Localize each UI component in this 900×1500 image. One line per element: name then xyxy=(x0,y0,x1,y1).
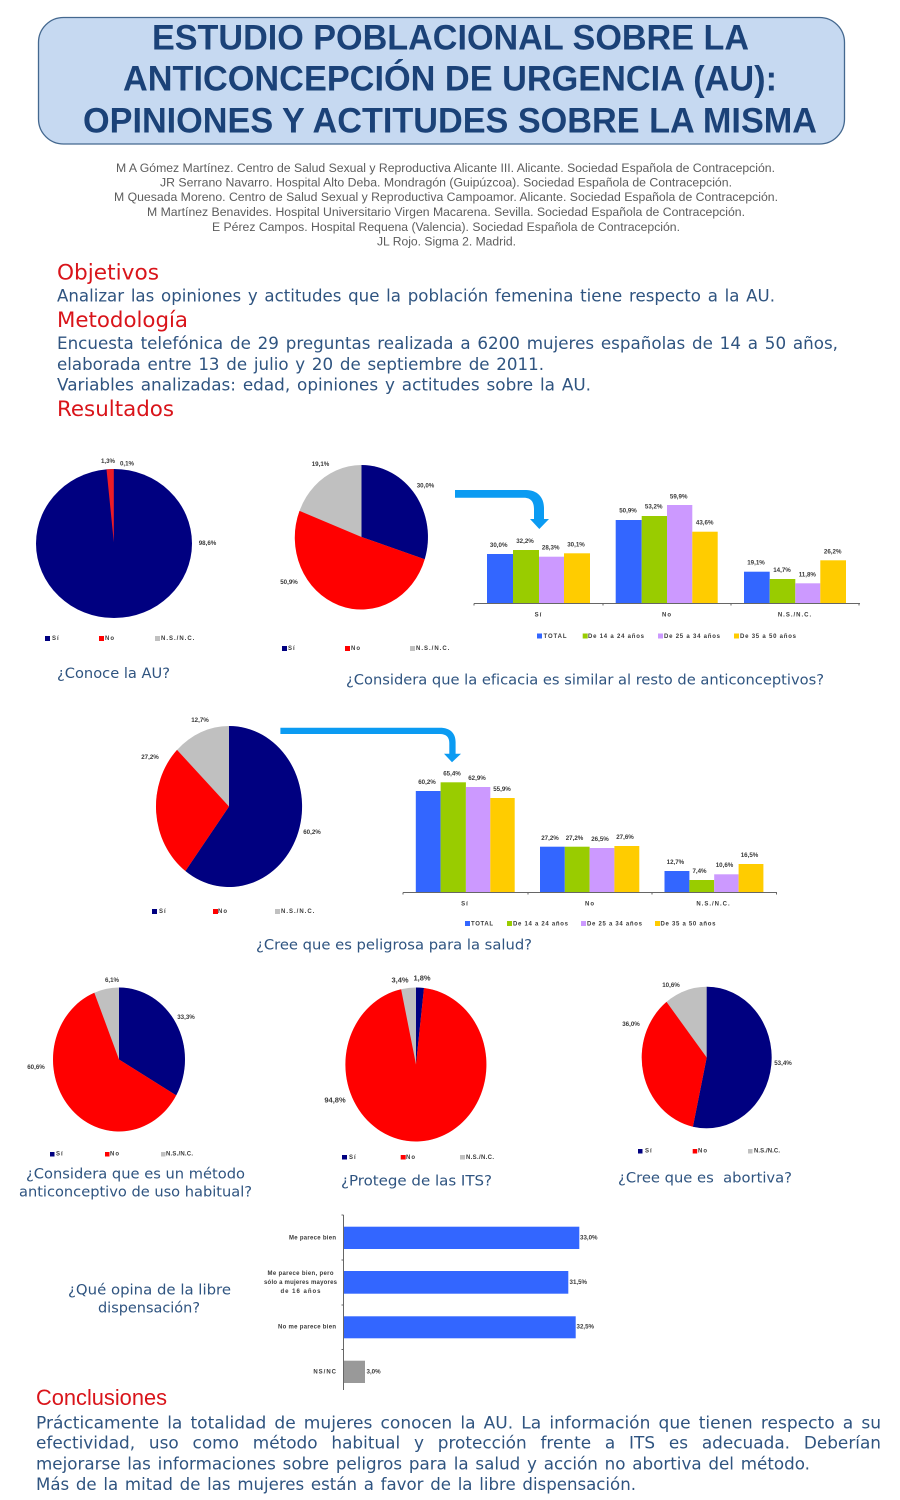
text: conclusiones: efectividad, uso como método habitual y protección frente a ITS es adecuada. Deberían xyxy=(36,1434,881,1454)
horizontal bar chart: libre dispensacion: 32,5% xyxy=(576,1324,595,1330)
pie chart: uso habitual: 60,6% xyxy=(27,1064,45,1071)
pie chart: eficacia similar: No xyxy=(351,646,361,652)
pie chart: abortiva: N.S./N.C. xyxy=(754,1148,781,1154)
bar chart: eficacia by age: 32,2% xyxy=(516,538,534,545)
bar chart: peligrosa by age: 10,6% xyxy=(716,862,734,869)
bar chart: eficacia by age: 50,9% xyxy=(619,508,637,515)
title banner: ESTUDIO POBLACIONAL SOBRE LA xyxy=(152,18,749,58)
bar chart: eficacia by age: Sí xyxy=(535,612,542,618)
bar chart: peligrosa by age: 65,4% xyxy=(443,770,461,778)
pie chart: abortiva: 10,6% xyxy=(662,982,680,989)
caption: uso habitual: ¿Considera que es un método xyxy=(26,1166,245,1182)
pie chart: conoce la AU: N.S./N.C. xyxy=(161,636,195,642)
authors list: JL Rojo. Sigma 2. Madrid. xyxy=(377,234,516,248)
bar chart: peligrosa by age: De 35 a 50 años xyxy=(660,922,716,928)
pie chart: abortiva: 36,0% xyxy=(622,1021,640,1028)
caption: ITS: ¿Protege de las ITS? xyxy=(341,1173,492,1189)
bar chart: eficacia by age: 11,8% xyxy=(799,571,816,578)
title banner: OPINIONES Y ACTITUDES SOBRE LA MISMA xyxy=(83,102,817,140)
bar chart: peligrosa by age: TOTAL xyxy=(471,922,494,928)
bar chart: eficacia by age: De 14 a 24 años xyxy=(588,634,645,640)
authors list: M A Gómez Martínez. Centro de Salud Sexual y Reproductiva Alicante III. Alicante. Sociedad Española de Contracepción. xyxy=(116,161,775,175)
bar chart: eficacia by age: 30,1% xyxy=(567,542,585,549)
pie chart: eficacia similar: N.S./N.C. xyxy=(416,646,450,652)
authors list: E Pérez Campos. Hospital Requena (Valencia). Sociedad Española de Contracepción. xyxy=(212,220,680,234)
bar chart: eficacia by age: 14,7% xyxy=(773,567,791,574)
pie chart: uso habitual xyxy=(27,977,195,1158)
pie chart: uso habitual: Sí xyxy=(56,1152,64,1158)
bar chart: eficacia by age: 43,6% xyxy=(696,519,714,526)
caption: uso habitual: anticonceptivo de uso habitual? xyxy=(19,1184,252,1200)
authors list: M Martínez Benavides. Hospital Universitario Virgen Macarena. Sevilla. Sociedad Española de Contracepción. xyxy=(147,205,745,219)
caption: conoce la AU: ¿Conoce la AU? xyxy=(57,666,170,682)
bar chart: eficacia by age: N.S./N.C. xyxy=(778,612,812,618)
caption: abortiva: ¿Cree que es abortiva? xyxy=(618,1170,792,1186)
pie chart: abortiva: Sí xyxy=(645,1148,653,1154)
heading: metodologia: Metodología xyxy=(57,308,188,332)
bar chart: peligrosa by age: 60,2% xyxy=(418,779,436,786)
pie chart: protege de las ITS: No xyxy=(406,1155,416,1161)
bar chart: eficacia by age: De 35 a 50 años xyxy=(740,634,797,640)
pie chart: conoce la AU: Sí xyxy=(52,636,60,642)
caption: libre dispensacion xyxy=(68,1282,231,1316)
bar chart: peligrosa by age: 27,6% xyxy=(616,834,634,841)
bar chart: eficacia by age: 28,3% xyxy=(542,545,560,552)
bar chart: peligrosa by age: Sí xyxy=(461,902,469,908)
authors list xyxy=(114,161,778,248)
pie chart: eficacia similar: 30,0% xyxy=(417,482,435,490)
caption: uso habitual xyxy=(19,1166,252,1200)
bar chart: eficacia by age: 59,9% xyxy=(670,494,688,501)
pie chart: peligrosa para la salud: Sí xyxy=(159,909,167,915)
pie chart: abortiva xyxy=(622,982,792,1154)
heading: conclusiones: Conclusiones xyxy=(36,1385,167,1410)
bar chart: peligrosa by age: 16,5% xyxy=(741,852,759,859)
caption: eficacia: ¿Considera que la eficacia es similar al resto de anticonceptivos? xyxy=(346,672,824,688)
bar chart: eficacia by age: 19,1% xyxy=(747,559,765,566)
title banner: ANTICONCEPCIÓN DE URGENCIA (AU): xyxy=(123,58,777,98)
pie chart: uso habitual: N.S./N.C. xyxy=(166,1152,194,1158)
pie chart: abortiva: 53,4% xyxy=(774,1060,792,1067)
bar chart: eficacia by age: TOTAL xyxy=(544,634,568,640)
horizontal bar chart: libre dispensacion: 3,0% xyxy=(366,1368,381,1376)
bar chart: eficacia by age: 30,0% xyxy=(490,542,508,549)
arrow: eficacia pie to bars xyxy=(455,490,549,529)
pie chart: peligrosa para la salud xyxy=(141,717,321,915)
pie chart: conoce la AU: 1,3% xyxy=(101,458,116,465)
pie chart: conoce la AU xyxy=(36,458,217,642)
bar chart: peligrosa by age: 27,2% xyxy=(566,835,584,842)
horizontal bar chart: libre dispensacion: sólo a mujeres mayores xyxy=(264,1280,338,1286)
text: metodologia: elaborada entre 13 de julio y 20 de septiembre de 2011. xyxy=(57,355,544,375)
bar chart: eficacia by age xyxy=(474,494,860,640)
pie chart: uso habitual: 6,1% xyxy=(105,977,120,984)
pie chart: protege de las ITS: 94,8% xyxy=(324,1096,346,1104)
bar chart: peligrosa by age: 55,9% xyxy=(493,786,511,793)
pie chart: protege de las ITS xyxy=(324,974,495,1161)
title banner xyxy=(38,18,844,144)
pie chart: peligrosa para la salud: 60,2% xyxy=(303,829,321,836)
bar chart: eficacia by age: De 25 a 34 años xyxy=(664,634,721,640)
caption: libre dispensacion: dispensación? xyxy=(98,1300,200,1316)
horizontal bar chart: libre dispensacion: 31,5% xyxy=(570,1279,588,1286)
pie chart: protege de las ITS: 1,8% xyxy=(413,974,431,982)
pie chart: uso habitual: No xyxy=(110,1152,120,1158)
bar chart: peligrosa by age: 62,9% xyxy=(468,775,486,782)
text: objetivos: Analizar las opiniones y actitudes que la población femenina tiene respecto a la AU. xyxy=(57,286,775,306)
pie chart: protege de las ITS: Sí xyxy=(349,1155,357,1161)
bar chart: peligrosa by age: De 25 a 34 años xyxy=(587,922,643,928)
text: metodologia xyxy=(57,334,838,396)
authors list: M Quesada Moreno. Centro de Salud Sexual y Reproductiva Campoamor. Alicante. Sociedad Española de Contracepción. xyxy=(114,190,778,204)
pie chart: peligrosa para la salud: 12,7% xyxy=(191,717,209,724)
pie chart: protege de las ITS: N.S./N.C. xyxy=(466,1155,495,1161)
bar chart: eficacia by age: 26,2% xyxy=(824,548,842,555)
bar chart: peligrosa by age: N.S./N.C. xyxy=(696,902,731,908)
text: conclusiones: Prácticamente la totalidad de mujeres conocen la AU. La información que tienen respecto a su xyxy=(36,1413,881,1433)
horizontal bar chart: libre dispensacion: Me parece bien, pero xyxy=(268,1271,334,1277)
pie chart: abortiva: No xyxy=(698,1148,708,1154)
bar chart: peligrosa by age: 12,7% xyxy=(667,859,685,866)
pie chart: protege de las ITS: 3,4% xyxy=(391,976,409,984)
text: conclusiones: Más de la mitad de las mujeres están a favor de la libre dispensación. xyxy=(36,1475,636,1495)
pie chart: eficacia similar xyxy=(280,461,450,652)
caption: peligrosa: ¿Cree que es peligrosa para la salud? xyxy=(256,938,532,954)
pie chart: eficacia similar: Sí xyxy=(288,646,296,652)
pie chart: conoce la AU: No xyxy=(105,636,115,642)
horizontal bar chart: libre dispensacion xyxy=(264,1215,598,1390)
pie chart: peligrosa para la salud: 27,2% xyxy=(141,754,159,761)
pie chart: conoce la AU: 98,6% xyxy=(199,540,217,547)
arrow: peligrosa pie to bars xyxy=(280,728,461,762)
bar chart: peligrosa by age: 27,2% xyxy=(541,835,559,842)
pie chart: eficacia similar: 50,9% xyxy=(280,579,298,586)
heading: resultados: Resultados xyxy=(57,397,174,421)
heading: objetivos: Objetivos xyxy=(57,260,159,284)
text: conclusiones: mejorarse las informaciones sobre peligros para la salud y acción no abortiva del método. xyxy=(36,1454,810,1474)
bar chart: peligrosa by age xyxy=(403,770,777,928)
bar chart: peligrosa by age: 26,5% xyxy=(591,836,609,843)
text: metodologia: Encuesta telefónica de 29 preguntas realizada a 6200 mujeres españolas de 14 a 50 años, xyxy=(57,334,838,354)
text: metodologia: Variables analizadas: edad, opiniones y actitudes sobre la AU. xyxy=(57,376,591,396)
pie chart: uso habitual: 33,3% xyxy=(177,1014,195,1021)
horizontal bar chart: libre dispensacion: de 16 años xyxy=(280,1289,322,1295)
horizontal bar chart: libre dispensacion: NS/NC xyxy=(313,1370,337,1376)
pie chart: peligrosa para la salud: No xyxy=(218,909,228,915)
horizontal bar chart: libre dispensacion: No me parece bien xyxy=(278,1324,337,1330)
text: conclusiones xyxy=(36,1413,881,1495)
bar chart: eficacia by age: 53,2% xyxy=(645,504,663,511)
bar chart: peligrosa by age: De 14 a 24 años xyxy=(513,922,569,928)
bar chart: eficacia by age: No xyxy=(662,612,672,618)
pie chart: peligrosa para la salud: N.S./N.C. xyxy=(281,909,315,915)
caption: libre dispensacion: ¿Qué opina de la libre xyxy=(68,1282,231,1298)
bar chart: peligrosa by age: 7,4% xyxy=(692,868,707,875)
bar chart: peligrosa by age: No xyxy=(585,902,595,908)
pie chart: eficacia similar: 19,1% xyxy=(312,461,330,468)
horizontal bar chart: libre dispensacion: 33,0% xyxy=(580,1234,598,1242)
authors list: JR Serrano Navarro. Hospital Alto Deba. Mondragón (Guipúzcoa). Sociedad Española de Contracepción. xyxy=(160,176,732,190)
horizontal bar chart: libre dispensacion: Me parece bien xyxy=(289,1236,337,1242)
pie chart: conoce la AU: 0,1% xyxy=(120,460,135,468)
